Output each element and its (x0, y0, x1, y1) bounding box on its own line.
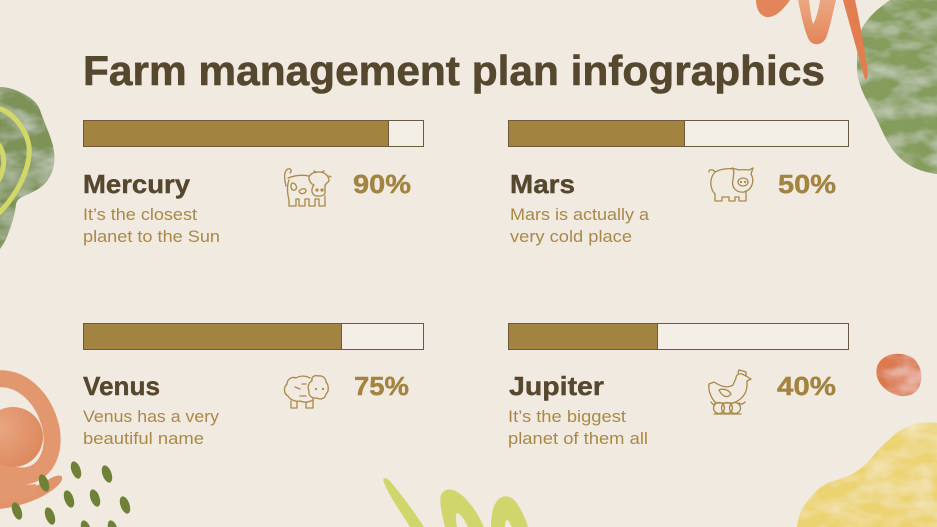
panel: Venus (83, 324, 424, 448)
icon: cow (285, 169, 331, 206)
heading: Jupiter: Jupiter (509, 371, 604, 401)
title: Farm management plan infographics (83, 47, 825, 94)
heading: Mercury: Mercury (83, 169, 191, 199)
decoration: green blob left (0, 87, 54, 249)
decoration: orange swirl bottom left (0, 379, 62, 509)
decoration: green dots (10, 460, 132, 527)
decoration: yellow-green scribble bottom centre (383, 478, 528, 527)
panel: Mercury (83, 120, 424, 246)
icon: sheep (284, 376, 328, 408)
value: 75%: 75% (354, 371, 409, 401)
panel: Mars (508, 120, 848, 246)
heading: Mars: Mars (510, 169, 575, 199)
text: Venus description: beautiful name (83, 429, 204, 448)
value: 50%: 50% (778, 169, 836, 199)
decoration: orange circle (876, 354, 921, 396)
text: Jupiter description: planet of them all (508, 429, 648, 448)
text: Mars description: Mars is actually a (510, 205, 650, 224)
progress bar: Venus 75% (84, 324, 424, 350)
icon: pig (709, 168, 753, 201)
panel: Jupiter (508, 324, 848, 448)
value: 40%: 40% (777, 371, 836, 401)
text: Mercury description: planet to the Sun (83, 227, 220, 246)
text: Venus description: Venus has a very (83, 407, 220, 426)
icon: hen on eggs (709, 370, 751, 414)
progress bar: Mars 50% (508, 120, 848, 146)
text: Mars description: very cold place (510, 227, 632, 246)
decoration: orange scribble top right (756, 0, 868, 79)
heading: Venus: Venus (83, 371, 160, 401)
progress bar: Mercury 90% (84, 120, 424, 146)
text: Jupiter description: It’s the biggest (508, 407, 626, 426)
progress bar: Jupiter 40% (508, 324, 848, 350)
text: Mercury description: It’s the closest (83, 205, 197, 224)
decoration: yellow blob bottom right (797, 422, 937, 527)
decoration: green blob top right (857, 0, 937, 174)
value: 90%: 90% (353, 169, 411, 199)
